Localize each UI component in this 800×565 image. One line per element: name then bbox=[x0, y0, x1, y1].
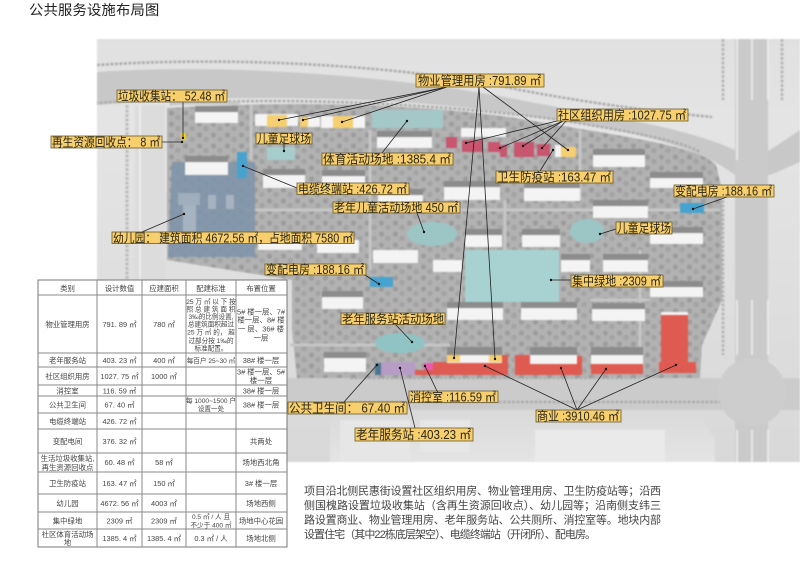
row: 卫生防疫站: 150 ㎡ bbox=[153, 479, 175, 488]
label: 老年服务站 bbox=[355, 367, 473, 442]
map base bbox=[97, 39, 800, 462]
row: 集中绿地: 不少于 400 ㎡ bbox=[190, 520, 232, 530]
row: 公共卫生间 bbox=[49, 396, 279, 413]
site plan map bbox=[97, 39, 800, 462]
row: 物业管理用房: 791. 89 ㎡ bbox=[102, 320, 137, 329]
row: 社区组织用房: 3# 楼一层、5# bbox=[237, 368, 286, 376]
row: 公共卫生间: 38# 楼一层 bbox=[243, 400, 279, 410]
residential site with planting bbox=[167, 104, 722, 378]
label: 儿童足球场 east: 儿童足球场 bbox=[617, 220, 671, 236]
row: 公共卫生间: 公共卫生间 bbox=[49, 400, 86, 410]
row: 老年服务站: 403. 23 ㎡ bbox=[102, 356, 137, 365]
row: 集中绿地: 场地中心花园 bbox=[239, 516, 283, 526]
row: 生活垃圾收集站: 生活垃圾收集站, bbox=[41, 454, 94, 463]
label: 变配电房 west: 变配电房 :188.16 ㎡ bbox=[266, 262, 364, 277]
row: 生活垃圾收集站: 再生资源回收点 bbox=[42, 463, 94, 472]
row: 幼儿园 bbox=[56, 499, 276, 508]
label: 变配电房 east: 变配电房 :188.16 ㎡ bbox=[675, 184, 772, 198]
label: 物业管理用房 bbox=[278, 73, 569, 360]
row: 物业管理用房: 楼一层、8# 楼 bbox=[237, 316, 285, 324]
row: 物业管理用房: 一层 bbox=[254, 334, 268, 342]
label: 儿童足球场 north bbox=[256, 131, 312, 152]
row: 社区体育活动场地 bbox=[42, 530, 276, 547]
east road bbox=[735, 39, 768, 462]
label: 老年儿童活动场地 bbox=[333, 200, 460, 233]
row: 社区组织用房: 楼一层 bbox=[250, 376, 272, 385]
row: 消控室: 消控室 bbox=[56, 386, 79, 396]
building roofs bbox=[185, 106, 703, 360]
row: 物业管理用房: 5# 楼一层、7# bbox=[237, 308, 286, 316]
label: 消控室 bbox=[409, 365, 498, 404]
row: 消控室: 116. 59 ㎡ bbox=[103, 386, 137, 396]
community rooms in crimson bbox=[446, 137, 550, 157]
row: 物业管理用房: 25 万 ㎡ 的， 超 bbox=[187, 328, 235, 336]
row: 社区体育活动场地: 社区体育活动场 bbox=[42, 530, 93, 539]
row: 社区组织用房: 社区组织用房 bbox=[45, 372, 90, 381]
row: 物业管理用房: 3‰的比例设置, bbox=[188, 312, 234, 321]
description paragraph: 路设置商业、物业管理用房、老年服务站、公共厕所、消控室等。地块内部 bbox=[304, 512, 661, 526]
row: 老年服务站: 老年服务站 bbox=[49, 356, 87, 365]
label: 消控室: 消控室 :116.59 ㎡ bbox=[410, 390, 496, 404]
label: 公共卫生间 bbox=[288, 364, 407, 416]
row: 变配电间: 376. 32 ㎡ bbox=[102, 437, 137, 446]
row: 电缆终端站: 426. 72 ㎡ bbox=[102, 417, 137, 426]
row: 生活垃圾收集站: 60. 48 ㎡ bbox=[104, 458, 135, 467]
label: 幼儿园 bbox=[112, 213, 354, 246]
label: 老年儿童活动场地: 老年儿童活动场地 450 ㎡ bbox=[334, 200, 458, 215]
label: 电缆终端站 bbox=[242, 165, 409, 196]
label: 变配电房 west bbox=[265, 262, 380, 285]
row: 集中绿地 bbox=[53, 512, 283, 530]
row: 物业管理用房: 过部分按 1‰的 bbox=[188, 336, 234, 345]
description paragraph: 侧国槐路设置垃圾收集站（含再生资源回收点）、幼儿园等；沿南侧支纬三 bbox=[304, 498, 661, 512]
row: 老年服务站: 38# 楼一层 bbox=[243, 356, 279, 365]
row: 物业管理用房: 标准配置。 bbox=[195, 344, 227, 352]
row: 幼儿园: 幼儿园 bbox=[56, 499, 79, 508]
title: 公共服务设施布局图 bbox=[29, 2, 159, 19]
south road and junction bbox=[97, 378, 800, 410]
row: 物业管理用房: 总建筑面积超过 bbox=[188, 320, 234, 328]
table header: 配建标准 bbox=[196, 284, 226, 293]
elderly service and toilet and fire rooms bbox=[381, 362, 415, 375]
north road bbox=[97, 69, 800, 175]
residential buildings bbox=[185, 112, 703, 372]
row: 社区体育活动场地: 1385. 4 ㎡ bbox=[147, 534, 182, 543]
row: 物业管理用房: 物业管理用房 bbox=[45, 320, 90, 329]
description paragraph: 项目沿北侧民惠街设置社区组织用房、物业管理用房、卫生防疫站等；沿西 bbox=[304, 484, 661, 498]
row: 社区体育活动场地: 地 bbox=[64, 538, 72, 547]
label: 再生资源回收点: 再生资源回收点： 8 ㎡ bbox=[52, 136, 160, 150]
row: 生活垃圾收集站: 场地西北角 bbox=[243, 458, 279, 467]
label: 儿童足球场 north: 儿童足球场 bbox=[257, 131, 311, 146]
label: 集中绿地 bbox=[550, 274, 663, 288]
west road bbox=[135, 105, 165, 280]
table header: 应建面积 bbox=[149, 284, 179, 293]
label: 社区组织用房: 社区组织用房 :1027.75 ㎡ bbox=[558, 108, 686, 122]
row: 生活垃圾收集站: 58 ㎡ bbox=[155, 458, 173, 467]
green activity areas bbox=[372, 110, 443, 128]
label: 老年服务站: 老年服务站 :403.23 ㎡ bbox=[356, 427, 471, 442]
blue power rooms bbox=[237, 152, 247, 178]
label: 垃圾收集站 bbox=[117, 88, 227, 139]
row: 卫生防疫站 bbox=[49, 479, 277, 488]
row: 卫生防疫站: 3# 楼一层 bbox=[245, 479, 277, 488]
road edge hedges bbox=[97, 62, 712, 152]
row: 老年服务站: 400 ㎡ bbox=[153, 356, 175, 365]
row: 物业管理用房: 照 总 建 筑 面 积 bbox=[187, 304, 236, 314]
label: 商业 bbox=[484, 364, 677, 424]
row: 幼儿园: 4672. 56 ㎡ bbox=[100, 499, 139, 508]
row: 幼儿园: 4003 ㎡ bbox=[151, 499, 178, 508]
row: 集中绿地: 2309 ㎡ bbox=[107, 516, 133, 526]
row: 公共卫生间: 每 1000~1500 户 bbox=[186, 396, 236, 405]
table header: 布置位置 bbox=[246, 284, 276, 293]
row: 社区体育活动场地: 场地北侧 bbox=[246, 534, 276, 543]
kindergarten zone bbox=[168, 162, 255, 257]
row: 变配电间: 变配电间 bbox=[53, 437, 82, 446]
row: 社区组织用房 bbox=[45, 368, 286, 385]
row: 消控室 bbox=[56, 386, 279, 396]
description paragraph: 设置住宅（其中22栋底层架空）、电缆终端站（开闭所）、配电房。 bbox=[304, 527, 596, 541]
row: 社区体育活动场地: 0.3 ㎡ / 人 bbox=[194, 534, 228, 543]
row: 集中绿地: 2309 ㎡ bbox=[151, 516, 178, 526]
row: 变配电间: 共两处 bbox=[250, 437, 273, 446]
row: 公共卫生间: 67. 40 ㎡ bbox=[104, 400, 135, 410]
label: 儿童足球场 east bbox=[599, 220, 672, 236]
row: 电缆终端站 bbox=[49, 417, 137, 426]
label: 商业: 商业 :3910.46 ㎡ bbox=[537, 408, 619, 424]
row: 物业管理用房 bbox=[45, 297, 286, 352]
row: 集中绿地: 集中绿地 bbox=[53, 516, 83, 526]
label: 变配电房 east bbox=[674, 184, 774, 210]
row: 生活垃圾收集站 bbox=[41, 454, 279, 472]
label: 体育活动场地 bbox=[322, 120, 453, 166]
table header bbox=[60, 284, 276, 293]
table header: 类别 bbox=[60, 284, 75, 293]
row: 物业管理用房: 780 ㎡ bbox=[153, 320, 175, 329]
commercial buildings in red bbox=[433, 315, 696, 375]
data table bbox=[38, 280, 287, 547]
description paragraph bbox=[304, 484, 661, 541]
row: 幼儿园: 场地西侧 bbox=[246, 499, 276, 508]
row: 物业管理用房: 25 万 ㎡ 以 下 按 bbox=[186, 297, 236, 306]
label: 垃圾收集站: 垃圾收集站： 52.48 ㎡ bbox=[118, 88, 225, 104]
label: 电缆终端站: 电缆终端站 :426.72 ㎡ bbox=[298, 182, 407, 196]
row: 消控室: 38# 楼一层 bbox=[243, 386, 279, 396]
row: 电缆终端站: 电缆终端站 bbox=[49, 417, 87, 426]
label: 老年服务站活动场地 bbox=[341, 312, 445, 343]
label: 幼儿园: 幼儿园： 建筑面积 4672.56 ㎡，占地面积 7580 ㎡ bbox=[113, 230, 353, 246]
south plots bbox=[330, 415, 715, 462]
label: 物业管理用房: 物业管理用房 :791.89 ㎡ bbox=[418, 73, 541, 88]
row: 社区组织用房: 1027. 75 ㎡ bbox=[100, 372, 139, 381]
label: 社区组织用房 bbox=[465, 108, 688, 149]
label: 老年服务站活动场地: 老年服务站活动场地 bbox=[342, 312, 444, 326]
property rooms in yellow bbox=[267, 115, 576, 362]
row: 卫生防疫站: 卫生防疫站 bbox=[49, 479, 87, 488]
table header: 设计数值 bbox=[105, 284, 135, 293]
label: 集中绿地: 集中绿地 :2309 ㎡ bbox=[572, 274, 661, 288]
row: 卫生防疫站: 163. 47 ㎡ bbox=[102, 479, 137, 488]
row: 社区组织用房: 1000 ㎡ bbox=[151, 372, 178, 381]
row: 老年服务站 bbox=[49, 356, 279, 365]
row: 社区体育活动场地: 1385. 4 ㎡ bbox=[102, 534, 137, 543]
row: 集中绿地: 0.5 ㎡ / 人 且 bbox=[192, 512, 230, 521]
row: 变配电间 bbox=[53, 437, 273, 446]
pale paths bbox=[170, 103, 720, 350]
label: 公共卫生间: 公共卫生间： 67.40 ㎡ bbox=[289, 402, 405, 416]
label: 体育活动场地: 体育活动场地 :1385.4 ㎡ bbox=[323, 152, 451, 166]
table grid bbox=[38, 280, 287, 547]
row: 公共卫生间: 设置一处 bbox=[198, 404, 225, 413]
label: 卫生防疫站 bbox=[496, 149, 613, 184]
label: 卫生防疫站: 卫生防疫站 :163.47 ㎡ bbox=[497, 170, 611, 184]
row: 老年服务站: 每百户 25~30 ㎡ bbox=[187, 356, 236, 365]
row: 物业管理用房: 一 层、36# 楼 bbox=[238, 324, 285, 334]
